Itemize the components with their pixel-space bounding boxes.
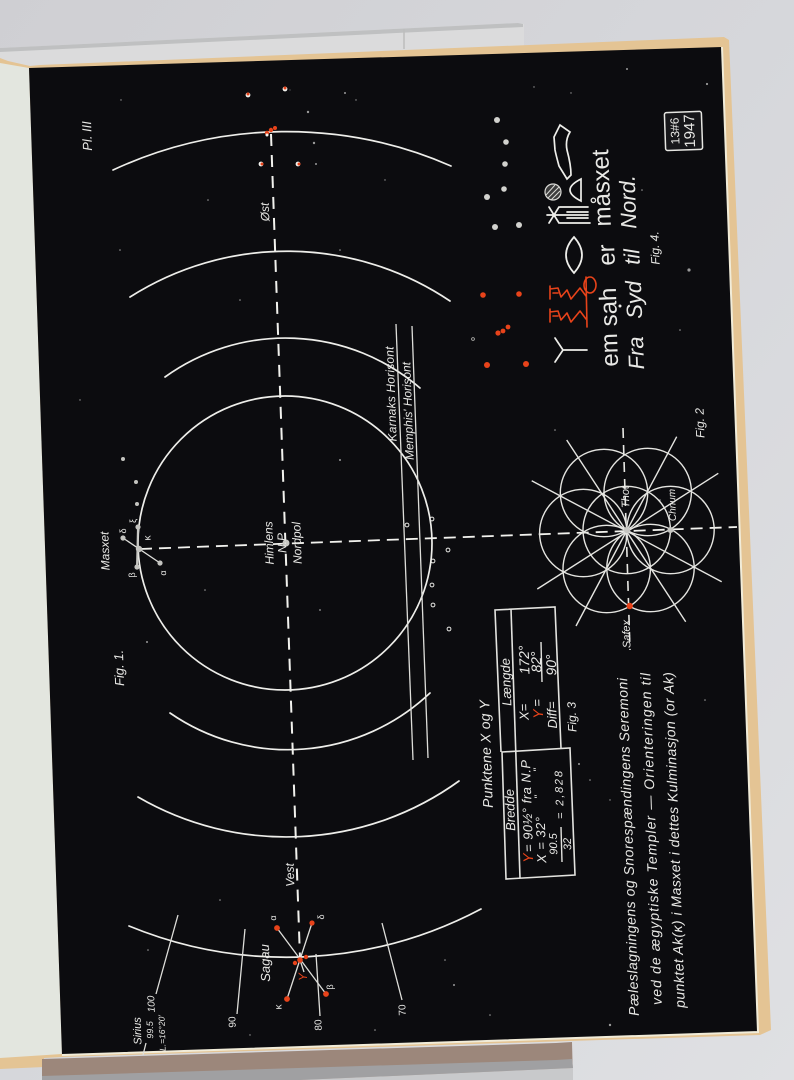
figure 2: rosette: Fig. 2	[692, 407, 708, 438]
horizon lines	[396, 324, 428, 760]
speckle	[79, 68, 708, 1036]
figure 3: table: Længde	[498, 658, 514, 706]
north pole dot	[282, 540, 290, 546]
figure 3: table: Y	[530, 707, 546, 719]
figure 3: table: X=	[516, 703, 532, 721]
fig 4 line one: er	[593, 244, 621, 266]
figure 2: rosette: Chnum	[667, 489, 679, 521]
hieroglyph: red signs	[550, 277, 596, 327]
fig 4 line two: Fra	[623, 336, 649, 370]
fig 4 line two: Nord.	[615, 175, 641, 229]
constellation: Sagau: β	[325, 984, 335, 990]
figure 2: rosette	[532, 407, 722, 650]
figure 3: table: = 90½° fra N.P	[518, 759, 536, 852]
hieroglyph: wave	[554, 125, 571, 179]
scale ticks 100 90 80 70: Sirius	[132, 1017, 144, 1045]
figure 3: table: X = 32°	[533, 817, 549, 864]
constellation: Sagau	[257, 914, 335, 1010]
label: Masxet: Masxet	[97, 531, 113, 571]
hieroglyph: lens	[566, 237, 582, 273]
plate label: Pl. III	[79, 121, 95, 151]
figure 4: star pattern, white	[484, 117, 522, 230]
label: Fig. 1: Fig. 1.	[111, 650, 127, 686]
figure 3: table: "	[532, 767, 544, 772]
fig 4 line one	[587, 149, 624, 367]
caption: Pæleslagningens og Snorespændingens Seremoni	[614, 677, 642, 1016]
label: Memphis' Horisont: Memphis' Horisont	[399, 361, 417, 460]
figure 3: table: "	[533, 794, 545, 799]
concentric arcs	[113, 132, 481, 957]
caption: ved de ægyptiske Templer — Orienteringen til	[637, 672, 665, 1005]
fig 4 line two: Syd	[621, 280, 647, 319]
library stamp: 1947	[681, 114, 699, 148]
constellation: Masxet on circle: α	[158, 570, 168, 576]
hieroglyph: hatched circle	[545, 184, 561, 200]
label: Øst: Øst	[258, 202, 272, 223]
label: Vest: Vest	[283, 862, 297, 887]
figure 3: table: 90°	[543, 654, 559, 676]
ring stars right of circle	[405, 517, 451, 631]
scale ticks 100 90 80 70: 100	[146, 995, 158, 1013]
scale ticks 100 90 80 70: 99.5	[145, 1020, 155, 1039]
caption	[614, 672, 688, 1016]
constellation: Sagau: Sagau	[257, 944, 273, 982]
hieroglyph: figure	[547, 207, 590, 223]
top plastic stand	[0, 23, 524, 72]
label: Nordpol: Nordpol	[289, 521, 305, 564]
label: Fig. 4: Fig. 4.	[647, 231, 663, 265]
figure 3: table: =	[529, 699, 545, 707]
constellation: Masxet on circle: β	[127, 572, 137, 578]
label: Himlens: Himlens	[261, 521, 277, 565]
figure 3: table: Fig. 3	[564, 701, 580, 732]
figure 4: star pattern, red	[472, 291, 529, 368]
scale ticks 100 90 80 70: 90	[227, 1016, 239, 1028]
figure 1: celestial diagram	[97, 132, 737, 958]
fig 4 line one: em	[596, 333, 624, 367]
bottom plastic stand	[42, 1042, 573, 1080]
constellation: Masxet on circle: δ	[118, 528, 128, 534]
figure 3: table: = 2,828	[553, 770, 567, 819]
hieroglyph: half circle	[570, 179, 581, 201]
figure 3: table	[476, 607, 580, 879]
figure 2: rosette: Safex	[620, 619, 633, 648]
constellation: Sagau: δ	[316, 914, 326, 920]
figure 3: table: 82°	[528, 651, 544, 673]
scale ticks 100 90 80 70: L.=16°20'	[156, 1014, 168, 1051]
left facing page	[0, 63, 62, 1058]
constellation: Sagau: κ	[273, 1003, 285, 1010]
scale ticks 100 90 80 70: 80	[313, 1019, 325, 1031]
meridian axis	[140, 527, 737, 549]
constellation: Sagau: Y	[296, 972, 310, 981]
constellation: Sagau: α	[268, 915, 278, 921]
label: N.P: N.P	[275, 533, 289, 553]
figure 3: table: 32	[562, 838, 574, 850]
fig 4 line one: sah	[595, 287, 623, 327]
figure 3: table: Bredde	[502, 789, 518, 831]
figure 3: table: Y	[520, 851, 536, 863]
library stamp	[664, 111, 703, 151]
scale ticks 100 90 80 70	[132, 915, 409, 1055]
caption: punktet Ak(κ) i Masxet i dettes Kulminasjon (or Ak)	[660, 672, 688, 1009]
fig 4 line two: til	[619, 248, 645, 265]
east-west axis	[271, 134, 300, 958]
label: Karnaks Horisont: Karnaks Horisont	[382, 346, 400, 442]
scale ticks 100 90 80 70: 70	[397, 1004, 409, 1016]
constellation: Masxet on circle: κ	[142, 534, 154, 541]
figure 3: table: Punktene X og Y	[476, 698, 496, 808]
star group: east	[246, 86, 300, 166]
figure 3: table: 90.5	[548, 832, 560, 855]
fig 4 line two	[615, 175, 649, 370]
figure 2: rosette: Thot	[620, 485, 632, 508]
fig 4 line one: måsxet	[587, 149, 617, 227]
constellation: Masxet on circle: ξ	[128, 519, 138, 523]
library stamp: 13#6	[668, 117, 682, 145]
hieroglyph: forked sign	[555, 338, 587, 362]
figure 3: table: 172°	[515, 645, 533, 675]
constellation: Masxet on circle	[118, 457, 168, 578]
figure 3: table: Diff=	[544, 701, 560, 729]
